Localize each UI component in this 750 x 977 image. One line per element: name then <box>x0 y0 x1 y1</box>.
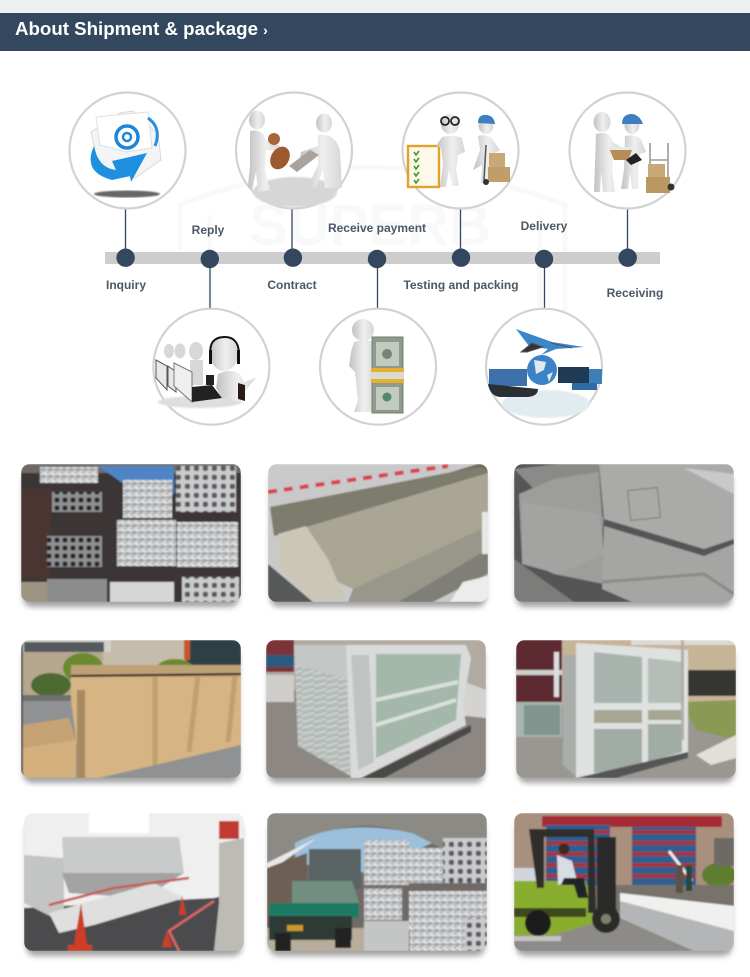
label: Inquiry: Inquiry <box>106 278 146 292</box>
label: Receiving: Receiving <box>607 286 663 300</box>
photo: bagged grey sacks <box>514 464 734 607</box>
faint watermark: SUPERB <box>249 193 491 258</box>
photo: wrapped frames on a rack in a room <box>24 813 244 956</box>
icon circle: testing and packing <box>402 92 518 208</box>
photo: wooden crates <box>21 640 241 783</box>
photo: truck and aluminium stacks <box>267 813 487 956</box>
process timeline <box>105 208 663 308</box>
timeline bar <box>105 252 660 264</box>
faint watermark <box>180 168 565 340</box>
heading: About Shipment & package › <box>15 18 268 39</box>
label: Receive payment: Receive payment <box>328 221 426 235</box>
top patterned strip <box>0 0 750 13</box>
photo: framed door panels <box>516 640 736 783</box>
label: Contract: Contract <box>267 278 317 292</box>
label: Reply: Reply <box>192 223 225 237</box>
icon circle: inquiry email <box>70 92 186 208</box>
connector lines <box>126 208 628 308</box>
label: Delivery: Delivery <box>521 219 568 233</box>
photo: wrapped long bundles <box>268 464 488 607</box>
photo: glass panels in shrink wrap <box>266 640 486 783</box>
icon circle: receiving <box>570 92 686 208</box>
header bar <box>0 13 750 51</box>
label: Testing and packing: Testing and packing <box>403 278 519 292</box>
photo: forklift moving bundle <box>514 813 736 956</box>
icon circle: receive payment <box>320 309 436 425</box>
step dots <box>116 249 637 268</box>
icon circle: contract <box>236 92 352 208</box>
photo: stacked aluminium profiles <box>21 464 241 607</box>
icon circle: reply headset agents <box>153 309 269 425</box>
icon circle: delivery <box>486 309 602 425</box>
